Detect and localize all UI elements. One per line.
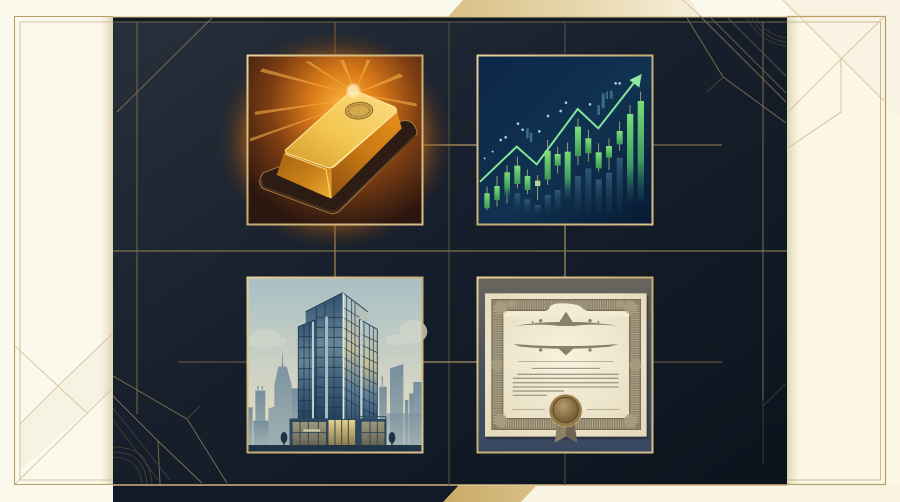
paper sheet <box>485 293 647 437</box>
tower main faces <box>306 293 343 420</box>
certificate text lines <box>513 361 619 410</box>
clouds <box>247 320 427 348</box>
sun rays <box>250 60 417 142</box>
tray under the bar <box>260 120 417 213</box>
panel art-deco corner lines <box>113 16 786 484</box>
top gold banner shape <box>448 0 703 17</box>
background bars <box>514 158 623 213</box>
card: office building <box>247 278 427 452</box>
wax seal <box>549 394 582 427</box>
bar right face <box>332 110 402 198</box>
dark central panel <box>113 17 787 502</box>
ground strip <box>248 445 422 452</box>
trees <box>281 432 395 446</box>
panel grid lines <box>113 22 787 485</box>
card: gold bar <box>248 56 422 224</box>
bottom gold band <box>443 486 900 502</box>
green candles <box>484 101 644 208</box>
ribbon <box>555 422 577 443</box>
card: stock chart <box>478 56 652 224</box>
gold glow around card <box>183 25 453 250</box>
window grid <box>298 293 377 420</box>
faded candles and dots <box>526 91 613 142</box>
wicks <box>487 92 641 210</box>
bar left face <box>277 150 332 198</box>
stamp on the bar <box>345 101 373 120</box>
ornamental border <box>492 299 641 430</box>
panel shadows on cream <box>100 17 800 485</box>
rising trend arrow <box>480 74 642 182</box>
bar top face <box>285 92 396 168</box>
tower wings <box>298 320 315 420</box>
middle flourish <box>513 344 618 355</box>
card: certificate <box>478 278 652 452</box>
paper inner top arch <box>503 302 629 317</box>
lobby podium <box>290 419 386 445</box>
corner scrolls <box>491 300 641 427</box>
top flourish <box>513 312 618 326</box>
city skyline <box>248 350 422 446</box>
